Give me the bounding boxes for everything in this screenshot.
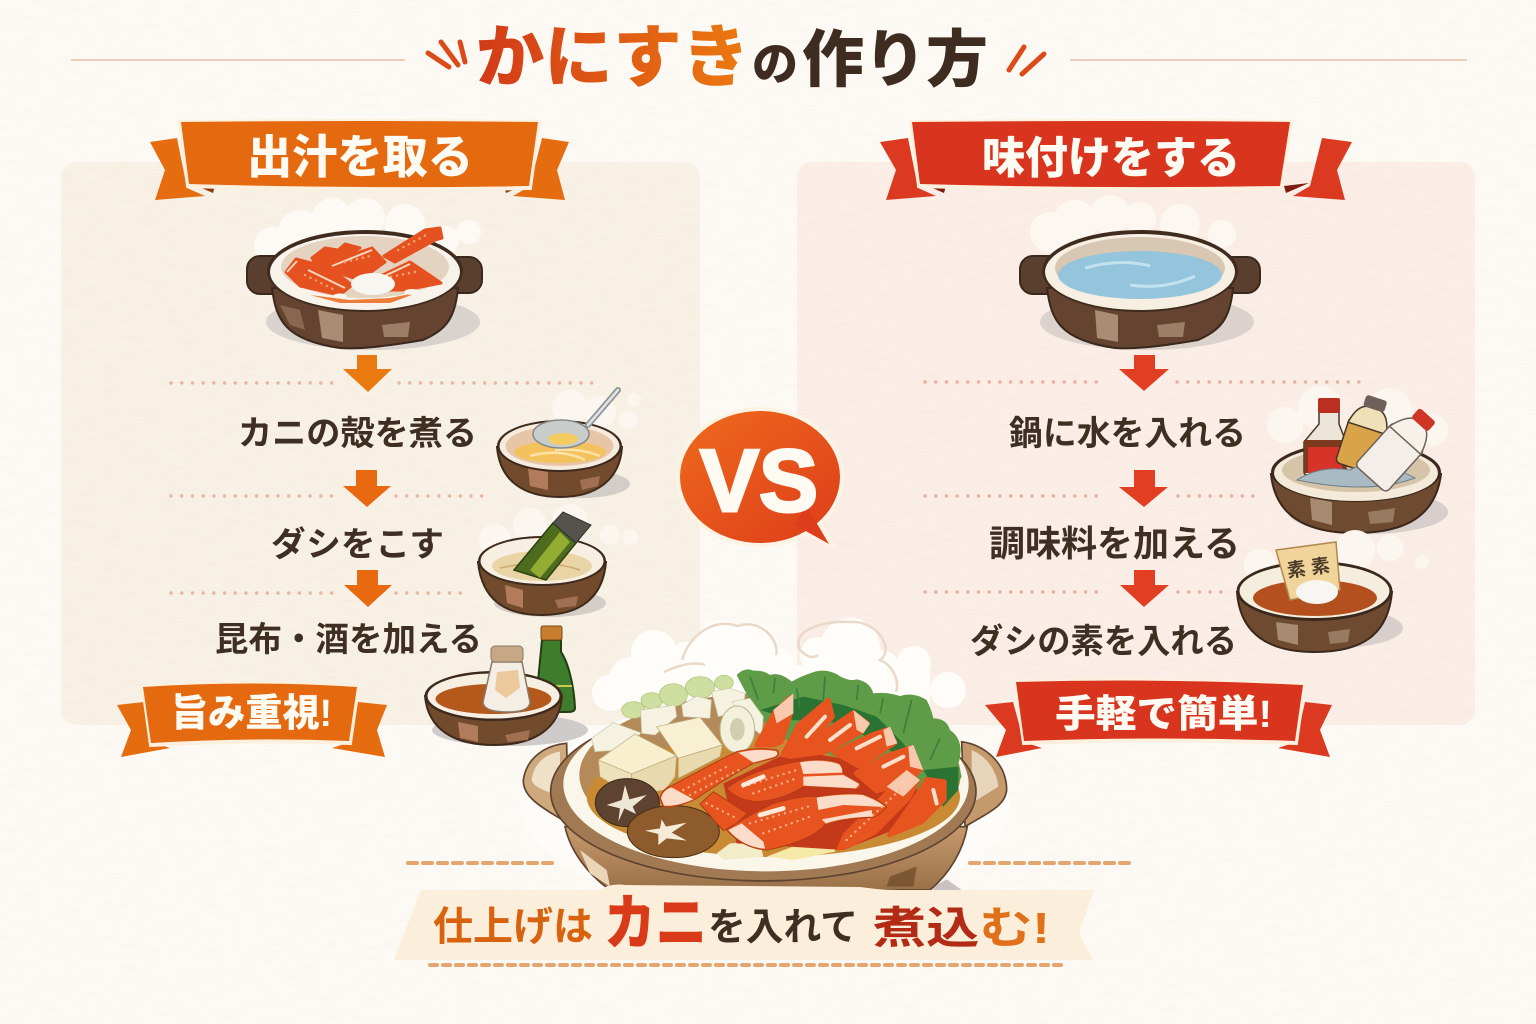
crab claw pale tips [661, 750, 885, 849]
bottle [514, 523, 576, 580]
flow: left steps arrows and dotted lines [171, 355, 594, 607]
rice [351, 273, 395, 295]
step text: カニの殻を煮る: カニの殻を煮る [238, 415, 477, 453]
pot: water in clay pot [1020, 195, 1260, 350]
ribbon: 旨み重視 [117, 684, 387, 757]
ribbon: right heading [880, 121, 1352, 200]
fish cake ring [720, 706, 755, 753]
napa at front [717, 842, 763, 860]
step text: 調味料を加える: 調味料を加える [989, 523, 1240, 564]
panel: right background [797, 162, 1475, 725]
amber bottle [1335, 392, 1396, 474]
ribbon label: 手軽で簡単! [1055, 694, 1272, 736]
arrow 2 [343, 470, 391, 507]
bowl: dashi stock packet [1236, 530, 1429, 652]
panel: left background [61, 162, 700, 725]
white vegetables [592, 688, 763, 752]
green bottle [535, 640, 575, 712]
bowl: broth with ladle [497, 390, 641, 498]
title text: の [752, 38, 798, 90]
bowl: kelp and sake [424, 626, 588, 746]
spark right [1009, 47, 1044, 74]
crab claws front [660, 749, 887, 850]
soy sauce bottle [1304, 412, 1346, 475]
main pot: kani-suki hot pot [523, 669, 1007, 890]
crab legs pale joints [773, 693, 923, 797]
煮込む: 煮込 む! [873, 904, 1050, 953]
mushroom 2 [627, 806, 719, 858]
banner: final step [394, 885, 1094, 960]
greens [737, 669, 962, 807]
ribbon label: 味付けをする [982, 134, 1240, 183]
ribbon: 手軽で簡単 [985, 681, 1332, 757]
arrow 2 [1119, 470, 1168, 507]
cabbage [622, 675, 733, 718]
arrow 3 [344, 570, 392, 607]
bowl: straining with green bottle [478, 504, 638, 617]
white bottle [1355, 401, 1443, 493]
pot handles [523, 743, 568, 823]
を入れて: を入れて [708, 907, 858, 949]
arrow 1 [1119, 355, 1169, 391]
mushroom 1 [595, 779, 659, 827]
powder [1296, 580, 1338, 604]
shell speckles [683, 765, 903, 840]
カニ: カニ [604, 890, 707, 957]
VS badge [676, 407, 844, 547]
bowl: seasoning bottles [1267, 386, 1448, 534]
pot rim [551, 702, 976, 881]
title rule right [1070, 59, 1467, 61]
packet [1276, 542, 1340, 600]
broth [587, 737, 960, 857]
tofu [598, 717, 722, 795]
flow: right steps arrows and dotted lines [925, 355, 1364, 607]
food base [723, 750, 927, 850]
jar [483, 662, 530, 712]
arrow 3 [1120, 570, 1169, 607]
crab shells [286, 228, 442, 303]
dashes around banner [408, 863, 1134, 965]
仕上げは: 仕上げは [433, 905, 593, 949]
ribbon label: 旨み重視! [171, 693, 332, 735]
VS text: VS [700, 431, 818, 530]
step text: 鍋に水を入れる: 鍋に水を入れる [1009, 415, 1246, 453]
packet text: 素 素 [1286, 555, 1331, 582]
pot shadow [933, 879, 962, 890]
ladle [588, 390, 618, 425]
ribbon: left heading [150, 121, 569, 200]
crab legs back [757, 697, 944, 848]
title [71, 20, 1467, 96]
spark left [428, 42, 465, 67]
title text: かにすき [476, 20, 750, 96]
steam [254, 198, 481, 263]
steam clouds above main pot [520, 618, 1010, 910]
water [1058, 251, 1222, 299]
title text: 作り方 [802, 26, 988, 95]
title rule left [71, 59, 405, 61]
pot body [565, 827, 967, 890]
ribbon label: 出汁を取る [247, 131, 473, 183]
item in bowl [1297, 465, 1415, 487]
cap [553, 512, 591, 543]
step text: 昆布・酒を加える: 昆布・酒を加える [215, 621, 482, 659]
step text: ダシの素を入れる: ダシの素を入れる [970, 622, 1237, 661]
step text: ダシをこす: ダシをこす [271, 525, 444, 564]
arrow 1 [343, 355, 392, 392]
pot: crab shells in clay pot [247, 198, 482, 350]
